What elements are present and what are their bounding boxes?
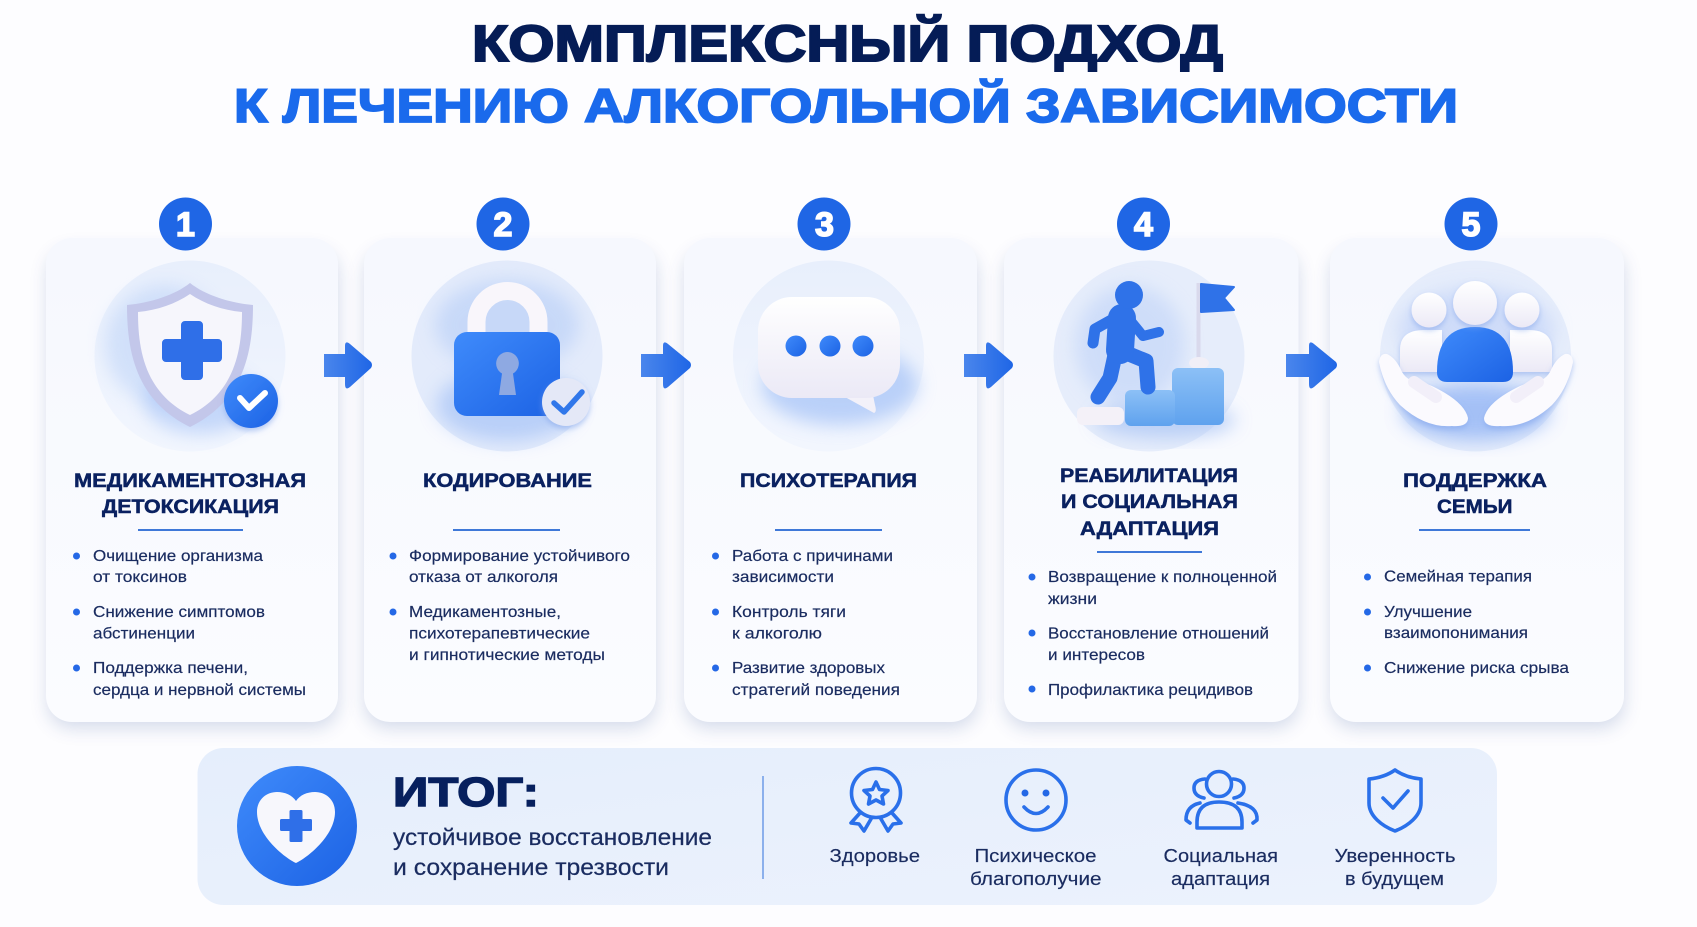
panel: step 1 detox <box>46 198 338 728</box>
panel: step 4 rehabilitation <box>1004 198 1298 728</box>
heading: ПСИХОТЕРАПИЯ <box>740 470 917 492</box>
bullet list: абстиненции <box>93 626 195 642</box>
step badge 4 <box>1117 198 1170 250</box>
bullet list: Профилактика рецидивов <box>1048 682 1253 699</box>
panel: step 3 psychotherapy <box>684 198 977 728</box>
bullet list: Медикаментозные, <box>409 604 561 621</box>
icon: heart with cross <box>237 766 357 886</box>
heading: МЕДИКАМЕНТОЗНАЯ <box>74 470 306 492</box>
step badge 1 <box>159 198 212 250</box>
arrow 1 to 2 <box>324 342 372 388</box>
arrow 4 to 5 <box>1286 342 1337 388</box>
title: К ЛЕЧЕНИЮ АЛКОГОЛЬНОЙ ЗАВИСИМОСТИ <box>234 79 1458 132</box>
heading: РЕАБИЛИТАЦИЯ <box>1060 465 1238 487</box>
icon: shield with cross <box>94 260 286 452</box>
bullet list: стратегий поведения <box>732 682 900 699</box>
bullet list: Снижение симптомов <box>93 604 265 621</box>
outcome: mental wellbeing: благополучие <box>970 869 1102 889</box>
bullet list: Восстановление отношений <box>1048 626 1269 642</box>
bullet list <box>1028 569 1277 699</box>
bullet list <box>1364 568 1569 677</box>
bullet list: к алкоголю <box>732 626 822 642</box>
bullet list: Работа с причинами <box>732 548 893 565</box>
heading: ПОДДЕРЖКА <box>1403 470 1547 492</box>
bullet list: сердца и нервной системы <box>93 682 306 699</box>
bullet list: Развитие здоровых <box>732 660 885 677</box>
bullet list: Возвращение к полноценной <box>1048 569 1277 586</box>
step badge 3 <box>798 198 850 250</box>
outcome: health: Здоровье <box>830 846 920 866</box>
title <box>234 14 1458 132</box>
heading: АДАПТАЦИЯ <box>1080 518 1219 540</box>
bullet list: психотерапевтические <box>409 626 590 642</box>
bullet list: Очищение организма <box>93 548 263 565</box>
title: КОМПЛЕКСНЫЙ ПОДХОД <box>472 14 1223 72</box>
bullet list: жизни <box>1048 591 1097 608</box>
outcome: confidence in future: в будущем <box>1345 869 1444 889</box>
outcome: social adaptation: адаптация <box>1171 869 1270 889</box>
step badge 5: 5 <box>1462 206 1480 244</box>
bullet list: Семейная терапия <box>1384 568 1532 586</box>
heading: КОДИРОВАНИЕ <box>423 470 592 492</box>
icon: padlock <box>412 260 602 452</box>
panel: result <box>198 748 1497 905</box>
outcome: confidence in future <box>1334 770 1456 889</box>
arrow 3 to 4 <box>964 342 1013 388</box>
bullet list: Снижение риска срыва <box>1384 660 1569 677</box>
bullet list <box>390 548 630 664</box>
heading <box>74 470 306 530</box>
icon: climbing figure and flag <box>1054 260 1244 452</box>
step badge 4: 4 <box>1134 206 1153 244</box>
heading: СЕМЬИ <box>1437 496 1512 518</box>
bullet list: от токсинов <box>93 569 187 586</box>
outcome: mental wellbeing <box>970 770 1102 889</box>
heading: И СОЦИАЛЬНАЯ <box>1061 491 1238 513</box>
bullet list: и интересов <box>1048 647 1145 664</box>
outcome: health <box>830 768 920 866</box>
bullet list: Поддержка печени, <box>93 660 248 677</box>
heading <box>1060 465 1238 552</box>
step badge 2: 2 <box>494 206 512 244</box>
result text: устойчивое восстановление <box>393 824 712 850</box>
panel: step 2 coding <box>364 198 656 728</box>
outcome: mental wellbeing: Психическое <box>974 846 1096 866</box>
outcome: social adaptation <box>1164 772 1278 889</box>
step badge 2 <box>476 198 530 250</box>
bullet list: отказа от алкоголя <box>409 569 558 586</box>
result text <box>393 769 712 880</box>
icon: speech bubble <box>733 260 924 452</box>
outcome: social adaptation: Социальная <box>1164 846 1278 866</box>
bullet list: и гипнотические методы <box>409 647 605 664</box>
outcome: confidence in future: Уверенность <box>1334 846 1456 866</box>
bullet list <box>73 548 306 699</box>
step badge 5 <box>1444 198 1498 250</box>
heading <box>1403 470 1547 530</box>
icon: family in hands <box>1379 260 1573 452</box>
bullet list: Контроль тяги <box>732 604 846 621</box>
panel: step 5 family support <box>1330 198 1624 728</box>
bullet list: Формирование устойчивого <box>409 548 630 565</box>
step badge 3: 3 <box>815 206 834 244</box>
bullet list: Улучшение <box>1384 604 1472 621</box>
arrow 2 to 3 <box>641 342 691 388</box>
bullet list <box>712 548 900 699</box>
result text: и сохранение трезвости <box>393 854 669 880</box>
step badge 1: 1 <box>176 206 195 244</box>
bullet list: взаимопонимания <box>1384 625 1528 642</box>
result text: ИТОГ: <box>393 769 539 815</box>
bullet list: зависимости <box>732 569 834 586</box>
heading: ДЕТОКСИКАЦИЯ <box>102 496 279 518</box>
